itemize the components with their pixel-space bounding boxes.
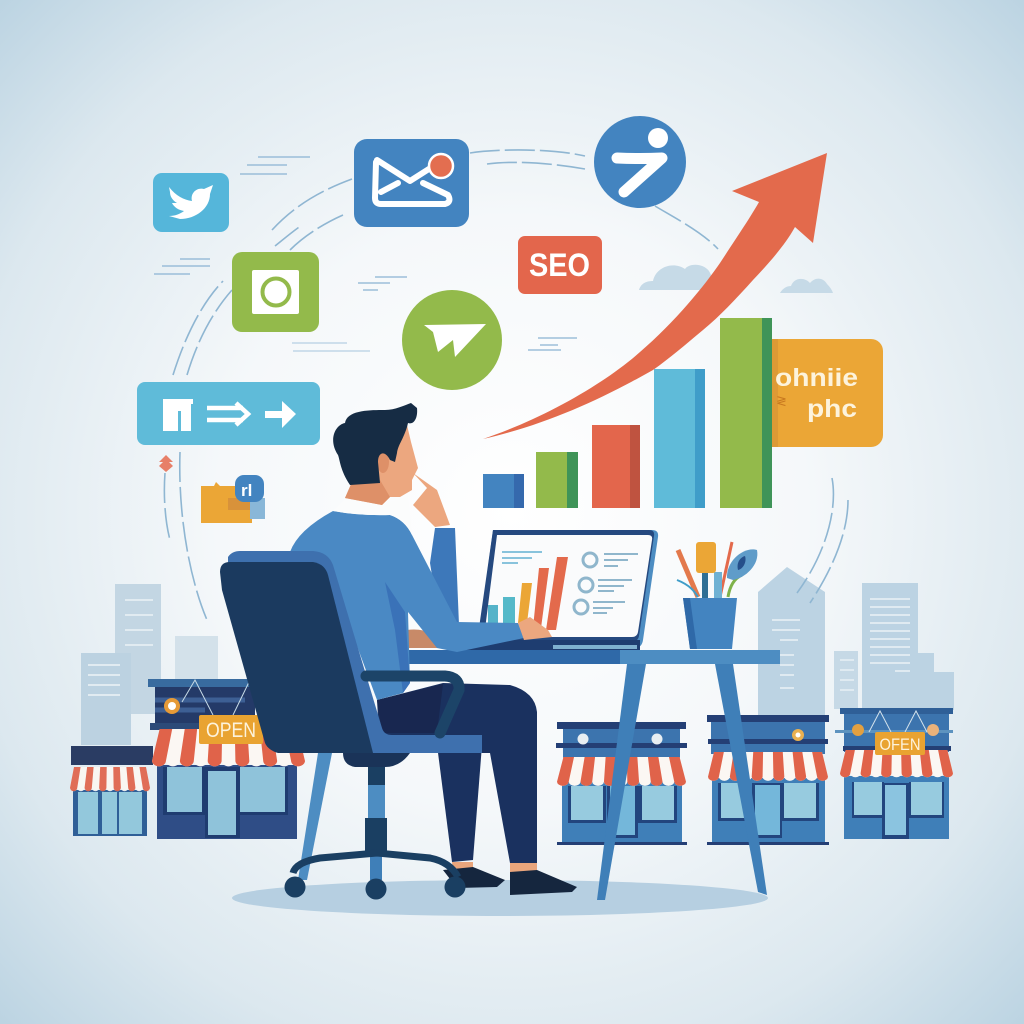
desk (408, 650, 780, 900)
dashed orbit lines (164, 150, 848, 620)
person (290, 403, 577, 895)
armrest (366, 676, 459, 733)
orange panel: ≷ (776, 393, 787, 408)
icon: twitter (153, 173, 229, 232)
seat underside (343, 753, 410, 767)
skyline left (81, 584, 218, 745)
icon: email (354, 139, 469, 227)
store 5 with open sign (835, 708, 953, 839)
floor shadow (232, 880, 768, 916)
icon: SEO badge: SEO (529, 247, 590, 283)
arrow banner (137, 382, 320, 445)
hair (333, 403, 417, 485)
speed lines (154, 157, 577, 351)
typing left hand (407, 630, 441, 648)
icon: green camera (232, 252, 319, 332)
back shell (228, 551, 482, 753)
growth arrow (483, 153, 827, 439)
chair post (368, 760, 385, 785)
orange panel: phc (807, 395, 857, 423)
orange panel: ohniie (775, 364, 858, 392)
chair base (293, 853, 458, 877)
thinking hand (413, 473, 450, 527)
store 4 (707, 715, 829, 845)
legs (377, 683, 537, 863)
store 2 with open sign: OPEN (206, 719, 256, 742)
shoes (443, 867, 505, 888)
ankles (452, 862, 537, 873)
laptop (460, 530, 658, 650)
folder icon (201, 475, 265, 523)
raised forearm (430, 528, 459, 625)
folder icon: rl (241, 481, 252, 500)
bar chart (483, 318, 772, 508)
torso and arm (290, 511, 524, 700)
neck and face (345, 425, 418, 505)
icon: SEO badge (518, 236, 602, 294)
icon: green send circle (402, 290, 502, 390)
clouds (639, 265, 833, 293)
chair leg (298, 753, 332, 880)
back cushion (220, 562, 373, 753)
skyline right (758, 567, 954, 715)
icon: blue circle logo (594, 116, 686, 208)
orange panel (772, 339, 883, 447)
ear (377, 451, 389, 473)
store 3 (556, 722, 687, 845)
laptop screen chart (488, 552, 568, 630)
collar (333, 496, 412, 535)
store 2 with open sign (148, 679, 305, 839)
store 5 with open sign: OFEN (880, 735, 920, 754)
office chair (220, 551, 482, 900)
store 1 (70, 746, 153, 836)
pencil cup (677, 542, 757, 649)
typing right hand (518, 617, 552, 640)
small up arrow (159, 455, 173, 472)
